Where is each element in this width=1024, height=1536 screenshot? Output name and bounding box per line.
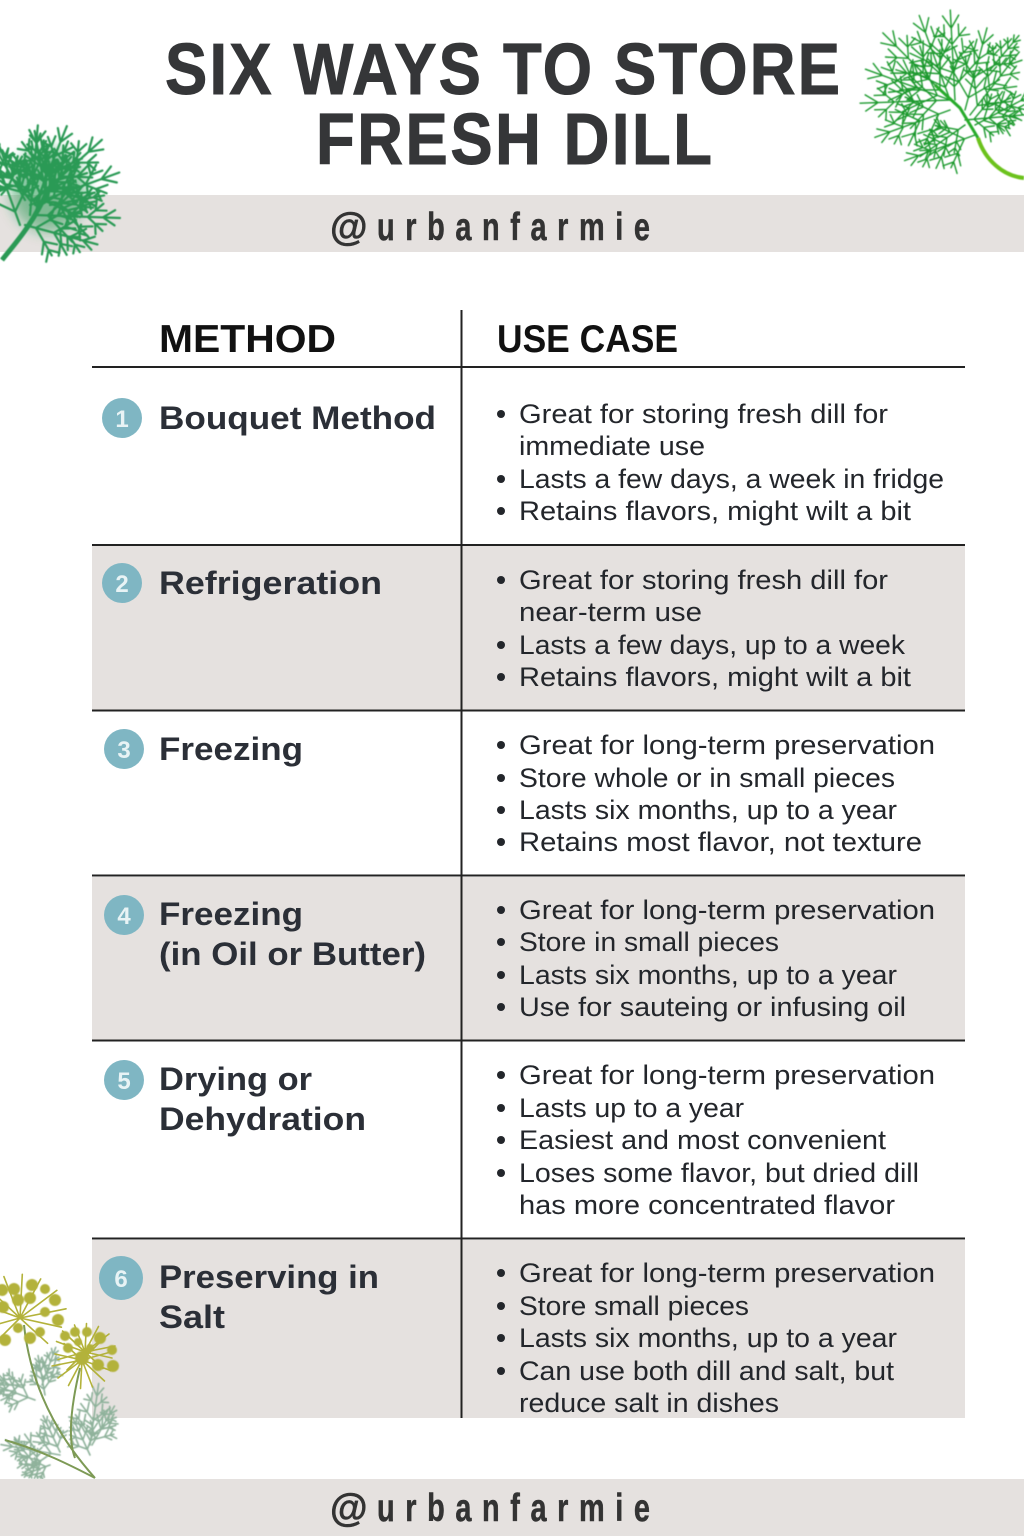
row 4: freezing in oil or butter: (in Oil or Butter) — [159, 936, 426, 972]
row 5: drying or dehydration: Easiest and most convenient — [519, 1125, 887, 1155]
row 4: freezing in oil or butter: Great for long-term preservation — [519, 895, 935, 925]
row 2: refrigeration — [92, 546, 965, 710]
row 5: drying or dehydration: Dehydration — [159, 1101, 366, 1137]
table header: METHOD — [159, 318, 336, 361]
row 4: freezing in oil or butter: Store in small pieces — [519, 927, 779, 957]
footer handle: urbanfarmie — [377, 1487, 650, 1530]
row 2: refrigeration: Great for storing fresh dill for — [519, 565, 888, 595]
header band — [0, 195, 1024, 252]
title: SIX WAYS TO STORE — [165, 30, 840, 110]
row 4: freezing in oil or butter — [92, 877, 965, 1040]
dill main branch — [935, 85, 978, 138]
row 6: preserving in salt: Can use both dill and salt, but — [519, 1356, 895, 1386]
row 6: preserving in salt: Great for long-term preservation — [519, 1258, 935, 1288]
icon: dill sprig top left — [0, 113, 132, 273]
row 2: refrigeration: near-term use — [519, 597, 702, 627]
row 2: refrigeration: Lasts a few days, up to a week — [519, 630, 906, 660]
row 6: preserving in salt — [92, 1240, 965, 1418]
header handle: urbanfarmie — [377, 206, 650, 249]
icon: flowering dill bottom left — [0, 1274, 120, 1479]
row 6: preserving in salt: Salt — [159, 1299, 225, 1335]
row 3: freezing: Store whole or in small pieces — [519, 763, 895, 793]
footer band — [0, 1479, 1024, 1536]
row 1: bouquet method: Great for storing fresh dill for — [519, 399, 888, 429]
row 3: freezing: Freezing — [159, 731, 303, 767]
row 5: drying or dehydration: 5 — [117, 1068, 131, 1095]
row 4: freezing in oil or butter: Lasts six months, up to a year — [519, 960, 897, 990]
row 6: preserving in salt: Store small pieces — [519, 1291, 749, 1321]
title — [165, 30, 840, 180]
row 5: drying or dehydration: has more concentrated flavor — [519, 1190, 895, 1220]
row 1: bouquet method: immediate use — [519, 431, 705, 461]
row 6: preserving in salt: 6 — [114, 1266, 128, 1293]
row 3: freezing — [104, 729, 935, 857]
row 5: drying or dehydration: Loses some flavor, but dried dill — [519, 1158, 919, 1188]
table header: USE CASE — [497, 318, 678, 361]
row 6: preserving in salt: Preserving in — [159, 1259, 379, 1295]
footer handle: @ — [330, 1487, 368, 1530]
row 5: drying or dehydration: Drying or — [159, 1061, 312, 1097]
row 3: freezing: Lasts six months, up to a year — [519, 795, 897, 825]
row 3: freezing: Retains most flavor, not texture — [519, 827, 922, 857]
title: FRESH DILL — [316, 100, 712, 180]
row 1: bouquet method: 1 — [115, 406, 129, 433]
row 3: freezing: 3 — [117, 737, 131, 764]
row 1: bouquet method — [102, 398, 944, 526]
icon: dill sprig top right — [853, 3, 1024, 189]
row 5: drying or dehydration — [104, 1060, 935, 1220]
row 1: bouquet method: Lasts a few days, a week in fridge — [519, 464, 944, 494]
row 3: freezing: Great for long-term preservation — [519, 730, 935, 760]
row 2: refrigeration: Retains flavors, might wilt a bit — [519, 662, 912, 692]
table header — [159, 318, 678, 361]
row 5: drying or dehydration: Great for long-term preservation — [519, 1060, 935, 1090]
row 4: freezing in oil or butter: Freezing — [159, 896, 303, 932]
header handle: @ — [330, 206, 368, 249]
row 2: refrigeration: 2 — [115, 571, 129, 598]
row 2: refrigeration: Refrigeration — [159, 565, 382, 601]
dill stem — [978, 138, 1024, 178]
row 5: drying or dehydration: Lasts up to a year — [519, 1093, 744, 1123]
row 1: bouquet method: Retains flavors, might wilt a bit — [519, 496, 912, 526]
row 1: bouquet method: Bouquet Method — [159, 400, 436, 436]
row 6: preserving in salt: Lasts six months, up to a year — [519, 1323, 897, 1353]
row 4: freezing in oil or butter: Use for sauteing or infusing oil — [519, 992, 906, 1022]
row 6: preserving in salt: reduce salt in dishes — [519, 1388, 779, 1418]
row 4: freezing in oil or butter: 4 — [117, 903, 131, 930]
